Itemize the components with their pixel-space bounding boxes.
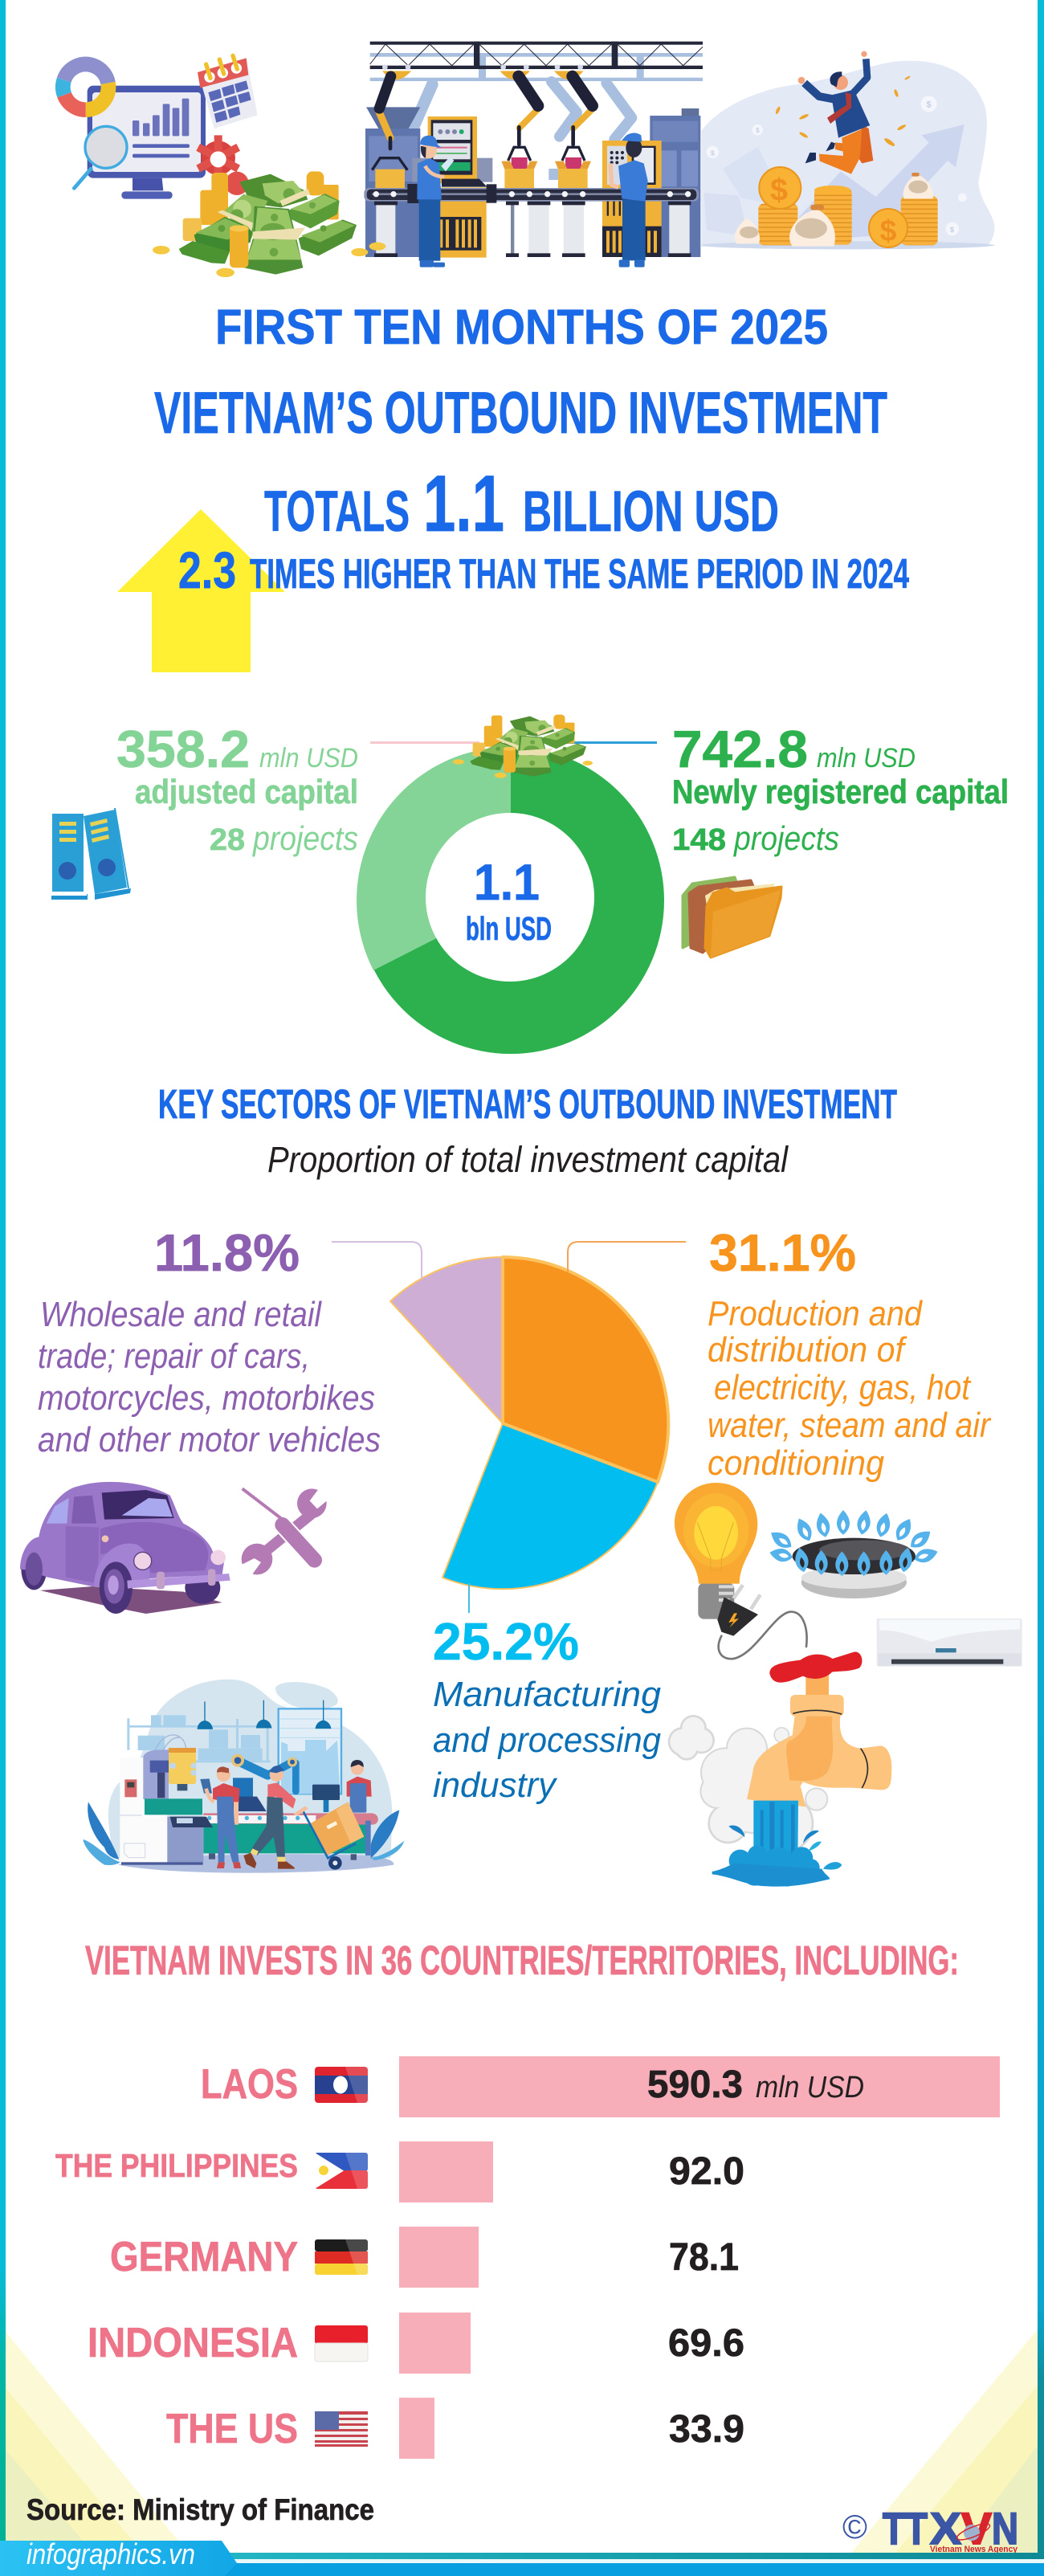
- left lower corner decoration: [6, 2332, 178, 2541]
- bar chart: investment by country: [55, 2056, 1000, 2459]
- callout: production and distribution: water, steam and air: [708, 1406, 992, 1445]
- callout: manufacturing: [433, 1612, 662, 1805]
- backdrop: $: [756, 127, 760, 134]
- row: Laos: LAOS: [201, 2061, 298, 2108]
- callout: production and distribution: conditioning: [708, 1443, 884, 1483]
- callout: production and distribution: electricity, gas, hot: [714, 1368, 972, 1407]
- callout: wholesale and retail: trade; repair of cars,: [38, 1337, 310, 1376]
- plants: [83, 1802, 404, 1865]
- callout: adjusted capital: 358.2: [116, 720, 250, 778]
- callout: manufacturing: industry: [433, 1766, 558, 1805]
- slice: production: [503, 1257, 668, 1482]
- row: Germany: 78.1: [669, 2236, 739, 2279]
- callout: production and distribution: 31.1%: [709, 1223, 856, 1282]
- backdrop: $: [711, 149, 715, 157]
- illustration: celebrating investor: [700, 51, 994, 249]
- icon: faucet: [747, 1652, 891, 1806]
- logo: TTXVN: T: [905, 2503, 928, 2554]
- gears: [198, 135, 249, 195]
- illustration: analytics monitor with money pile: [56, 55, 366, 277]
- callout: newly registered capital: 742.8: [672, 720, 808, 778]
- calendar: [198, 55, 258, 129]
- callout: adjusted capital: adjusted capital: [135, 773, 358, 810]
- title line 3: TOTALS: [264, 480, 410, 544]
- cart and box: [293, 1802, 364, 1870]
- row: Germany: [110, 2227, 739, 2288]
- money pile: [153, 171, 366, 277]
- conveyor: [203, 1813, 378, 1860]
- logo: TTXVN: X: [930, 2503, 961, 2554]
- callout: newly registered capital: mln USD: [817, 743, 916, 774]
- logo: TTXVN: V: [961, 2503, 992, 2554]
- logo: TTXVN: Vietnam News Agency: [930, 2545, 1018, 2554]
- row: Germany: GERMANY: [110, 2234, 298, 2280]
- left border: [0, 0, 6, 2546]
- callout: wholesale and retail: and other motor vehicles: [38, 1420, 381, 1459]
- conveyor: [364, 184, 699, 203]
- robot arm: [231, 1754, 297, 1811]
- slice: wholesale: [390, 1257, 503, 1423]
- flag: Indonesia: [315, 2325, 368, 2362]
- robot arms: [379, 71, 593, 149]
- row: Philippines: THE PHILIPPINES: [55, 2147, 298, 2184]
- leader line: newly registered capital: [560, 741, 657, 744]
- right lower corner decoration: [851, 2329, 1038, 2553]
- logo: TTXVN: T: [883, 2503, 905, 2554]
- leader line: 11.8%: [332, 1242, 422, 1279]
- worker left: [417, 136, 454, 267]
- subheading: Proportion of total investment capital: [267, 1139, 789, 1180]
- right machine: [650, 108, 700, 257]
- ground: [118, 1854, 394, 1873]
- control panel left: [428, 116, 487, 258]
- callout: adjusted capital: mln USD: [259, 743, 358, 774]
- subtitle: 2.3 times higher: [178, 541, 909, 599]
- backdrop: $: [950, 226, 955, 234]
- row: Indonesia: [88, 2313, 744, 2374]
- worker with tablet: [200, 1766, 241, 1868]
- monitor: [312, 1785, 340, 1812]
- row: Philippines: [55, 2141, 744, 2202]
- worker right: [347, 1760, 372, 1860]
- logo: TTXVN: [883, 2503, 1018, 2554]
- callout: wholesale and retail: motorcycles, motorbikes: [38, 1378, 375, 1418]
- callout: wholesale and retail: [38, 1223, 381, 1459]
- title line 3: BILLION USD: [523, 480, 779, 544]
- flag: Philippines: [315, 2153, 368, 2189]
- title block: [154, 300, 887, 548]
- callout: adjusted capital: projects: [251, 819, 358, 857]
- callout: manufacturing: 25.2%: [433, 1612, 579, 1671]
- subtitle: 2.3 times higher: 2.3: [178, 541, 236, 599]
- row: Laos: 590.3: [647, 2064, 743, 2106]
- flag: United States: [315, 2411, 368, 2447]
- callout: newly registered capital: projects: [732, 819, 839, 857]
- icon: purple car: [20, 1482, 230, 1614]
- logo: TTXVN: N: [992, 2503, 1018, 2554]
- leader line: 31.1%: [568, 1242, 686, 1272]
- donut icon: [56, 58, 115, 116]
- backdrop: $: [927, 100, 932, 109]
- illustration: factory workers: [83, 1680, 404, 1873]
- row: Laos: mln USD: [756, 2071, 864, 2104]
- icon: money pile on donut: [453, 715, 593, 778]
- coin stacks and bags: $: [880, 213, 897, 247]
- row: Philippines: 92.0: [669, 2150, 744, 2193]
- leader line: adjusted capital: [370, 741, 479, 744]
- left machine: [365, 107, 492, 257]
- slice: manufacturing: [442, 1423, 658, 1589]
- yellow up arrow: [117, 509, 285, 672]
- callout: production and distribution: distribution of: [708, 1330, 907, 1370]
- stray coins: [352, 243, 385, 256]
- donut centre value: bln USD: [466, 910, 552, 947]
- title line 1: FIRST TEN MONTHS OF 2025: [215, 300, 828, 354]
- flag: Laos: [315, 2067, 368, 2103]
- falling coins: [775, 76, 911, 148]
- row: Laos: [201, 2056, 1000, 2117]
- title line 3: 1.1: [423, 459, 504, 548]
- icon: water: [712, 1801, 842, 1887]
- title line 3: [264, 459, 779, 548]
- conveyor legs: [374, 202, 691, 257]
- flag: Germany: [315, 2239, 368, 2275]
- icon: wrench and screwdriver: [241, 1488, 333, 1577]
- window: [279, 1708, 341, 1794]
- row: Indonesia: 69.6: [668, 2322, 744, 2365]
- footer band: [0, 2553, 1044, 2576]
- callout: newly registered capital: [672, 720, 1009, 857]
- icon: air conditioner: [877, 1619, 1022, 1666]
- icon: gas burner: [768, 1509, 940, 1598]
- backdrop: [700, 61, 994, 249]
- source: Source: Ministry of Finance: [27, 2493, 374, 2526]
- leader line: 25.2%: [468, 1583, 470, 1613]
- jumping man: [798, 51, 873, 174]
- callout: wholesale and retail: Wholesale and retail: [40, 1295, 322, 1334]
- illustration: factory line: [352, 42, 703, 267]
- icon: steam: [668, 1715, 828, 1853]
- worker with cart: [243, 1766, 296, 1869]
- icon: books: [51, 808, 131, 900]
- ghost robot arms: [414, 82, 632, 139]
- callout: production and distribution: Production and: [708, 1294, 923, 1333]
- lamps: [198, 1700, 331, 1729]
- backdrop: [108, 1680, 392, 1858]
- row: US: THE US: [166, 2406, 298, 2452]
- callout: adjusted capital: [116, 720, 358, 857]
- machine: [120, 1735, 213, 1865]
- donut centre value: [466, 855, 552, 947]
- donut centre value: 1.1: [474, 855, 540, 911]
- pie chart: [390, 1257, 668, 1589]
- monitor: [88, 86, 206, 199]
- control panel right: [602, 141, 662, 257]
- shelves: [127, 1715, 271, 1762]
- footer tab: infographics.vn: infographics.vn: [27, 2537, 195, 2570]
- callout: wholesale and retail: 11.8%: [154, 1223, 300, 1282]
- icon: folders: [683, 877, 781, 957]
- right border: [1038, 0, 1044, 2559]
- coin stacks and bags: $: [770, 172, 788, 207]
- callout: manufacturing: and processing: [433, 1721, 662, 1760]
- callout: manufacturing: Manufacturing: [433, 1675, 662, 1714]
- callout: production and distribution: [708, 1223, 992, 1483]
- callout: adjusted capital: 28: [210, 823, 245, 857]
- copyright symbol: ©: [842, 2508, 867, 2545]
- boxes and grippers: [372, 147, 591, 188]
- row: US: [166, 2398, 744, 2459]
- magnifier: [74, 126, 127, 188]
- icons: utilities: [668, 1483, 1022, 1887]
- row: US: 33.9: [669, 2408, 744, 2451]
- callout: newly registered capital: 148: [672, 823, 726, 857]
- row: Indonesia: INDONESIA: [88, 2320, 298, 2366]
- donut chart: [357, 747, 664, 1054]
- worker right: [610, 133, 648, 267]
- icon: plug: [717, 1585, 807, 1659]
- coin stacks and bags: [735, 167, 938, 247]
- truss: [370, 42, 703, 81]
- icon: light bulb: [675, 1483, 757, 1619]
